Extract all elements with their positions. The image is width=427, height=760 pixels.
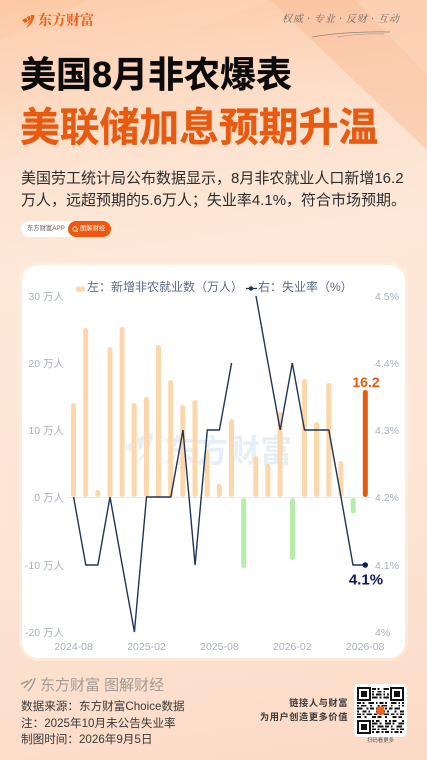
right axis labels: 4.3% bbox=[375, 425, 399, 437]
qr code bbox=[354, 684, 407, 737]
legend: 左：新增非农就业数（万人） bbox=[87, 279, 243, 294]
left axis labels: -10 万人 bbox=[25, 560, 64, 572]
x axis labels bbox=[54, 641, 385, 653]
value label: payrolls: 16.2 bbox=[352, 374, 380, 390]
tagline bbox=[260, 698, 348, 722]
left axis labels: -20 万人 bbox=[25, 627, 64, 639]
unemployment line bbox=[74, 296, 365, 632]
background diagonal light bands bbox=[68, 0, 427, 150]
slogan: 权威 · 专业 · 反财 · 互动 bbox=[282, 14, 400, 25]
bars: new nonfarm jobs bbox=[71, 327, 343, 497]
title line 2: 美联储加息预期升温 bbox=[20, 106, 378, 150]
footer brand: 东方财富 图解财经 bbox=[40, 677, 164, 694]
right axis labels: 4.2% bbox=[375, 492, 399, 504]
value label: unemployment: 4.1% bbox=[349, 572, 383, 588]
chart panel bbox=[22, 265, 405, 658]
search pill bbox=[21, 221, 111, 237]
source notes: 数据来源：东方财富Choice数据 bbox=[21, 700, 185, 713]
left axis labels: 20 万人 bbox=[28, 358, 64, 370]
source notes: 注：2025年10月未公告失业率 bbox=[21, 716, 176, 730]
tagline: 链接人与财富 bbox=[289, 698, 348, 708]
legend bbox=[76, 279, 353, 294]
tagline: 为用户创造更多价值 bbox=[260, 712, 348, 722]
intro text bbox=[21, 170, 406, 209]
highlighted latest bar bbox=[363, 390, 368, 497]
qr caption: 扫码看更多 bbox=[367, 738, 394, 744]
slogan bbox=[282, 14, 400, 38]
right axis labels: 4.4% bbox=[375, 358, 399, 370]
watermark: 东方财富 bbox=[164, 433, 292, 469]
source notes bbox=[21, 700, 185, 746]
left axis labels: 10 万人 bbox=[28, 425, 64, 437]
intro text: 万人，远超预期的5.6万人；失业率4.1%，符合市场预期。 bbox=[21, 192, 406, 209]
left axis labels: 0 万人 bbox=[34, 492, 64, 504]
right axis labels bbox=[375, 291, 399, 639]
negative bars bbox=[241, 498, 356, 568]
right axis labels: 4.1% bbox=[375, 560, 399, 572]
zero line bbox=[67, 496, 372, 498]
x axis labels: 2024-08 bbox=[54, 641, 93, 653]
x axis labels: 2025-02 bbox=[127, 641, 166, 653]
x axis labels: 2026-02 bbox=[273, 641, 312, 653]
latest point marker bbox=[362, 562, 368, 568]
right axis labels: 4% bbox=[375, 627, 390, 639]
left axis labels: 30 万人 bbox=[28, 291, 64, 303]
logo: brand: 东方财富 bbox=[38, 14, 94, 29]
title line 1: 美国8月非农爆表 bbox=[20, 54, 292, 95]
x axis labels: 2026-08 bbox=[346, 641, 385, 653]
x axis labels: 2025-08 bbox=[200, 641, 239, 653]
legend: 右：失业率（%） bbox=[258, 279, 353, 294]
source notes: 制图时间：2026年9月5日 bbox=[21, 733, 152, 746]
right axis labels: 4.5% bbox=[375, 291, 399, 303]
search pill: 东方财富APP bbox=[27, 225, 65, 232]
search pill: 图解财经 bbox=[80, 225, 105, 232]
left axis labels bbox=[25, 291, 64, 639]
intro text: 美国劳工统计局公布数据显示，8月非农就业人口新增16.2 bbox=[21, 170, 404, 187]
